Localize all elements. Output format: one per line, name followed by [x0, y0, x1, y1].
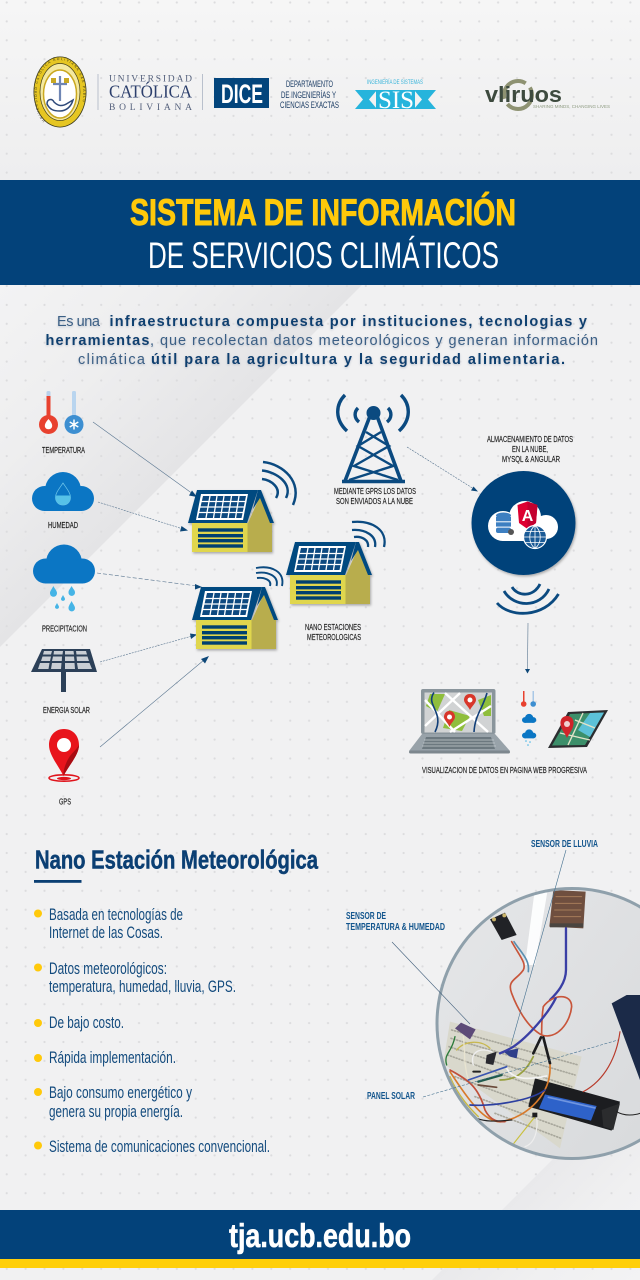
list: features: De bajo costo. — [49, 1014, 124, 1032]
logo: Universidad Católica Boliviana wordmark: BOLIVIANA — [109, 103, 192, 113]
label: energia solar: ENERGIA SOLAR — [43, 705, 90, 715]
list: features: Datos meteorológicos: — [49, 960, 167, 978]
list: features: Internet de las Cosas. — [49, 924, 163, 942]
logo: Universidad Católica Boliviana wordmark — [98, 74, 203, 113]
list: features: Rápida implementación. — [49, 1049, 176, 1067]
logo: SIS Ingeniería de Sistemas: INGENIERÍA DE SISTEMAS — [367, 79, 423, 86]
list: features — [34, 906, 270, 1156]
icon: wifi waves house 3 — [352, 522, 385, 547]
callout: panel solar — [367, 1040, 618, 1102]
text: Departamento de Ingenierías y Ciencias Exactas: DEPARTAMENTO — [286, 79, 333, 89]
station: weather house 3 — [286, 542, 372, 604]
label: nano estaciones: NANO ESTACIONES — [305, 622, 361, 632]
intro paragraph: climática — [78, 352, 146, 368]
text: Departamento de Ingenierías y Ciencias Exactas: CIENCIAS EXACTAS — [280, 100, 339, 110]
icon: thermometers — [39, 391, 84, 434]
intro paragraph: infraestructura compuesta por instituciones, tecnologias y — [110, 314, 587, 330]
logo: VLIR-UOS — [485, 81, 610, 110]
icon: GPS pin — [49, 729, 79, 781]
list: features: genera su propia energía. — [49, 1103, 183, 1121]
arrow: cloud to web visualisation — [525, 623, 530, 674]
callout: panel solar: PANEL SOLAR — [367, 1091, 416, 1102]
list: features: Basada en tecnologías de — [49, 906, 183, 924]
logo: VLIR-UOS: SHARING MINDS, CHANGING LIVES — [533, 104, 610, 110]
arrow: humedad to station — [98, 502, 188, 532]
callout: sensor de lluvia: SENSOR DE LLUVIA — [531, 839, 598, 850]
icon: solar panel — [31, 649, 97, 692]
logo: VLIR-UOS: vliruos — [485, 82, 562, 107]
icon: cloud storage circle: A — [522, 508, 534, 525]
icon: laptop with map — [409, 689, 510, 754]
logo: Universidad Católica Boliviana wordmark: UNIVERSIDAD — [109, 74, 192, 84]
text: Departamento de Ingenierías y Ciencias Exactas — [280, 79, 339, 110]
intro paragraph: herramientas — [46, 333, 150, 349]
logo: SIS Ingeniería de Sistemas — [355, 79, 436, 114]
station: weather house 1 — [188, 490, 274, 552]
logo: SIS Ingeniería de Sistemas: SIS — [378, 87, 414, 114]
arrow: temperatura to station — [93, 422, 197, 497]
icon: small data icons — [521, 691, 536, 746]
intro paragraph — [46, 314, 598, 368]
title banner: SISTEMA DE INFORMACIÓN — [130, 191, 516, 233]
label: almacenamiento: ALMACENAMIENTO DE DATOS — [487, 434, 573, 444]
label: GPRS: SON ENVIADOS A LA NUBE — [336, 496, 413, 506]
arrow: energia solar to station — [100, 634, 197, 662]
text: Departamento de Ingenierías y Ciencias Exactas: DE INGENIERÍAS Y — [281, 90, 336, 100]
list: features: temperatura, humedad, lluvia, GPS. — [49, 978, 236, 996]
logo: DICE — [214, 78, 269, 109]
intro paragraph: Es una — [57, 314, 101, 330]
list: features: Sistema de comunicaciones convencional. — [49, 1138, 270, 1156]
label: GPRS: MEDIANTE GPRS LOS DATOS — [334, 486, 416, 496]
icon: rain cloud — [33, 544, 95, 611]
callout: sensor de temperatura y humedad: SENSOR DE — [346, 911, 386, 922]
arrow: tower to cloud — [407, 447, 478, 492]
arrow: GPS to station — [100, 656, 209, 747]
list: features: Bajo consumo energético y — [49, 1084, 193, 1102]
icon: humidity cloud — [32, 472, 94, 511]
footer band: URL — [0, 1210, 640, 1268]
label: nano estaciones: METEOROLOGICAS — [307, 632, 361, 642]
callout: sensor de temperatura y humedad: TEMPERATURA & HUMEDAD — [346, 922, 445, 933]
icon: tablet with map — [548, 710, 608, 748]
logo: Universidad Católica Boliviana wordmark: CATÓLICA — [109, 80, 192, 102]
icon: cloud storage circle — [472, 471, 576, 575]
label: almacenamiento — [487, 434, 573, 464]
icon: wifi waves house 1 — [262, 462, 296, 505]
label: precipitacion: PRECIPITACION — [42, 624, 87, 634]
photo: prototype sensor circuit — [430, 880, 640, 1170]
arrow: precipitacion to station — [97, 573, 202, 590]
intro paragraph: , que recolectan datos meteorológicos y generan información — [150, 333, 598, 349]
label: humedad: HUMEDAD — [48, 520, 78, 530]
icon: signal waves under cloud — [497, 584, 558, 613]
label: almacenamiento: MYSQL & ANGULAR — [502, 454, 560, 464]
icon: wifi waves house 2 — [256, 567, 282, 586]
title banner: DE SERVICIOS CLIMÁTICOS — [148, 235, 499, 276]
footer band: URL: tja.ucb.edu.bo — [229, 1217, 411, 1254]
icon: radio tower — [338, 395, 408, 482]
heading: Nano Estación Meteorológica: Nano Estación Meteorológica — [35, 844, 318, 874]
label: temperatura: TEMPERATURA — [42, 445, 85, 455]
logo: Universidad Católica Boliviana seal: UNIVERSIDAD CATÓLICA BOLIVIANA SAN PABLO — [34, 58, 86, 122]
callout: sensor de lluvia — [511, 839, 598, 1045]
intro paragraph: útil para la agricultura y la seguridad alimentaria. — [151, 352, 565, 368]
title banner — [0, 180, 640, 285]
callout: sensor de temperatura y humedad — [346, 911, 470, 1024]
label: nano estaciones — [305, 622, 361, 642]
station: weather house 2 — [192, 587, 278, 649]
label: GPRS — [334, 486, 416, 506]
label: GPS: GPS — [59, 796, 71, 806]
logo: DICE: DICE — [221, 79, 263, 109]
label: almacenamiento: EN LA NUBE, — [512, 444, 548, 454]
